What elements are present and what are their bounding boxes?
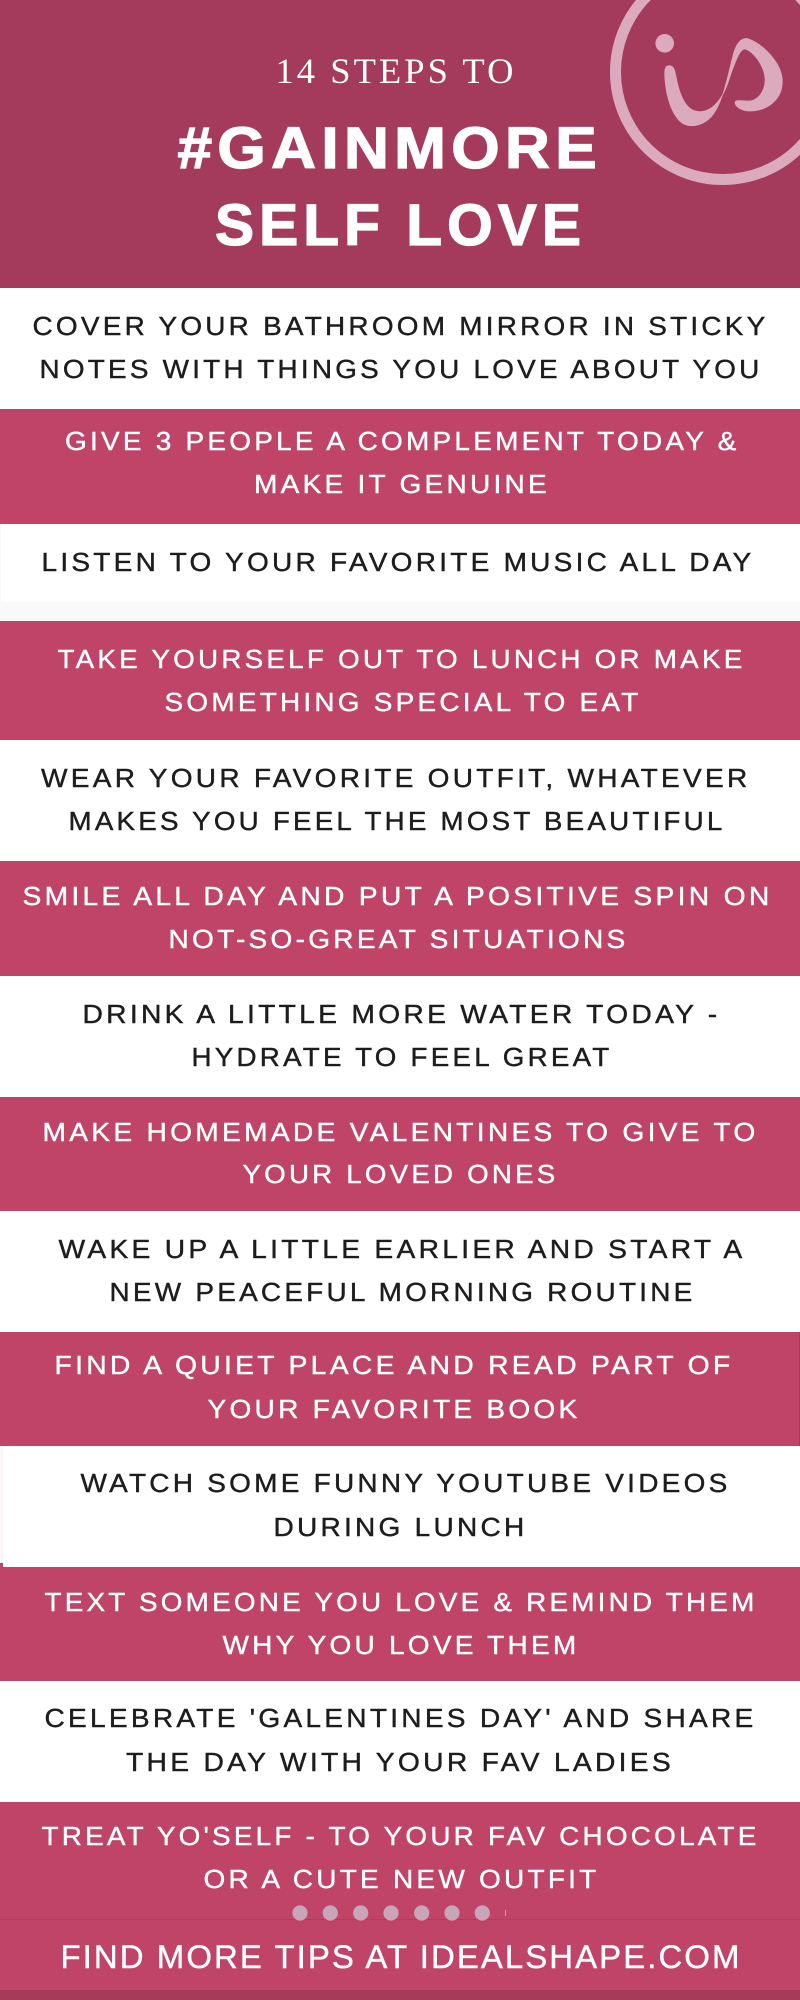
step 13 text: [44, 1703, 756, 1777]
panel: step 11: [0, 1446, 800, 1567]
panel: header: [0, 0, 800, 288]
step 12 text: TEXT SOMEONE YOU LOVE & REMIND THEM: [44, 1587, 758, 1617]
step 10 text: [54, 1350, 734, 1424]
step 9 text: NEW PEACEFUL MORNING ROUTINE: [110, 1277, 696, 1307]
footer text: FIND MORE TIPS AT IDEALSHAPE.COM: [60, 1939, 742, 1975]
panel: step 2: [0, 409, 800, 524]
step 4 text: TAKE YOURSELF OUT TO LUNCH OR MAKE: [58, 644, 746, 674]
panel: step 8: [0, 1097, 800, 1211]
step 6 text: NOT-SO-GREAT SITUATIONS: [168, 924, 628, 954]
step 11 text: WATCH SOME FUNNY YOUTUBE VIDEOS: [80, 1468, 731, 1498]
step 7 text: HYDRATE TO FEEL GREAT: [192, 1042, 612, 1072]
panel: step 3: [0, 524, 800, 621]
title: self love: SELF LOVE: [215, 193, 586, 258]
step 6 text: SMILE ALL DAY AND PUT A POSITIVE SPIN ON: [22, 881, 773, 911]
step 6 text: [22, 881, 773, 954]
title: 14 steps to: 14 STEPS TO: [276, 51, 516, 91]
step 1 text: [32, 311, 768, 384]
step 1 text: NOTES WITH THINGS YOU LOVE ABOUT YOU: [40, 354, 762, 384]
panel: step 1: [0, 288, 800, 409]
step 8 text: MAKE HOMEMADE VALENTINES TO GIVE TO: [42, 1117, 758, 1147]
step 4 text: [58, 644, 746, 717]
step 10 text: YOUR FAVORITE BOOK: [208, 1394, 580, 1424]
step 5 text: [41, 763, 750, 836]
step 8 text: [42, 1117, 758, 1189]
step 13 text: CELEBRATE 'GALENTINES DAY' AND SHARE: [44, 1703, 756, 1733]
panel: step 13: [0, 1681, 800, 1802]
step 5 text: MAKES YOU FEEL THE MOST BEAUTIFUL: [68, 806, 726, 836]
step 10 text: FIND A QUIET PLACE AND READ PART OF: [54, 1350, 734, 1380]
panel: step 4: [0, 621, 800, 740]
step 12 text: WHY YOU LOVE THEM: [222, 1630, 580, 1660]
step 7 text: [82, 999, 720, 1072]
step 11 text: [80, 1468, 731, 1542]
pagination dots: [292, 1905, 506, 1921]
step 14 text: TREAT YO'SELF - TO YOUR FAV CHOCOLATE: [42, 1821, 760, 1851]
panel: step 10: [0, 1332, 800, 1446]
panel: step 9: [0, 1211, 800, 1332]
step 11 text: DURING LUNCH: [274, 1512, 528, 1542]
step 5 text: WEAR YOUR FAVORITE OUTFIT, WHATEVER: [41, 763, 750, 793]
step 9 text: WAKE UP A LITTLE EARLIER AND START A: [58, 1234, 746, 1264]
panel: footer: [0, 1919, 800, 2000]
step 2 text: MAKE IT GENUINE: [254, 469, 550, 499]
step 8 text: YOUR LOVED ONES: [242, 1159, 558, 1189]
step 14 text: [42, 1821, 760, 1894]
step 9 text: [58, 1234, 746, 1307]
panel: step 6: [0, 861, 800, 976]
panel: step 5: [0, 740, 800, 861]
panel: step 12: [0, 1567, 800, 1681]
step 7 text: DRINK A LITTLE MORE WATER TODAY -: [82, 999, 720, 1029]
step 4 text: SOMETHING SPECIAL TO EAT: [164, 687, 642, 717]
panel: step 14: [0, 1802, 800, 1919]
step 3 text: LISTEN TO YOUR FAVORITE MUSIC ALL DAY: [42, 547, 754, 577]
step 13 text: THE DAY WITH YOUR FAV LADIES: [126, 1747, 674, 1777]
step 2 text: GIVE 3 PEOPLE A COMPLEMENT TODAY &: [65, 426, 740, 456]
panel: step 7: [0, 976, 800, 1097]
step 12 text: [44, 1587, 758, 1660]
step 14 text: OR A CUTE NEW OUTFIT: [204, 1864, 600, 1894]
step 1 text: COVER YOUR BATHROOM MIRROR IN STICKY: [32, 311, 768, 341]
title: #gainmore: #GAINMORE: [178, 116, 602, 181]
step 2 text: [65, 426, 740, 499]
logo: IS circle: [616, 0, 800, 180]
